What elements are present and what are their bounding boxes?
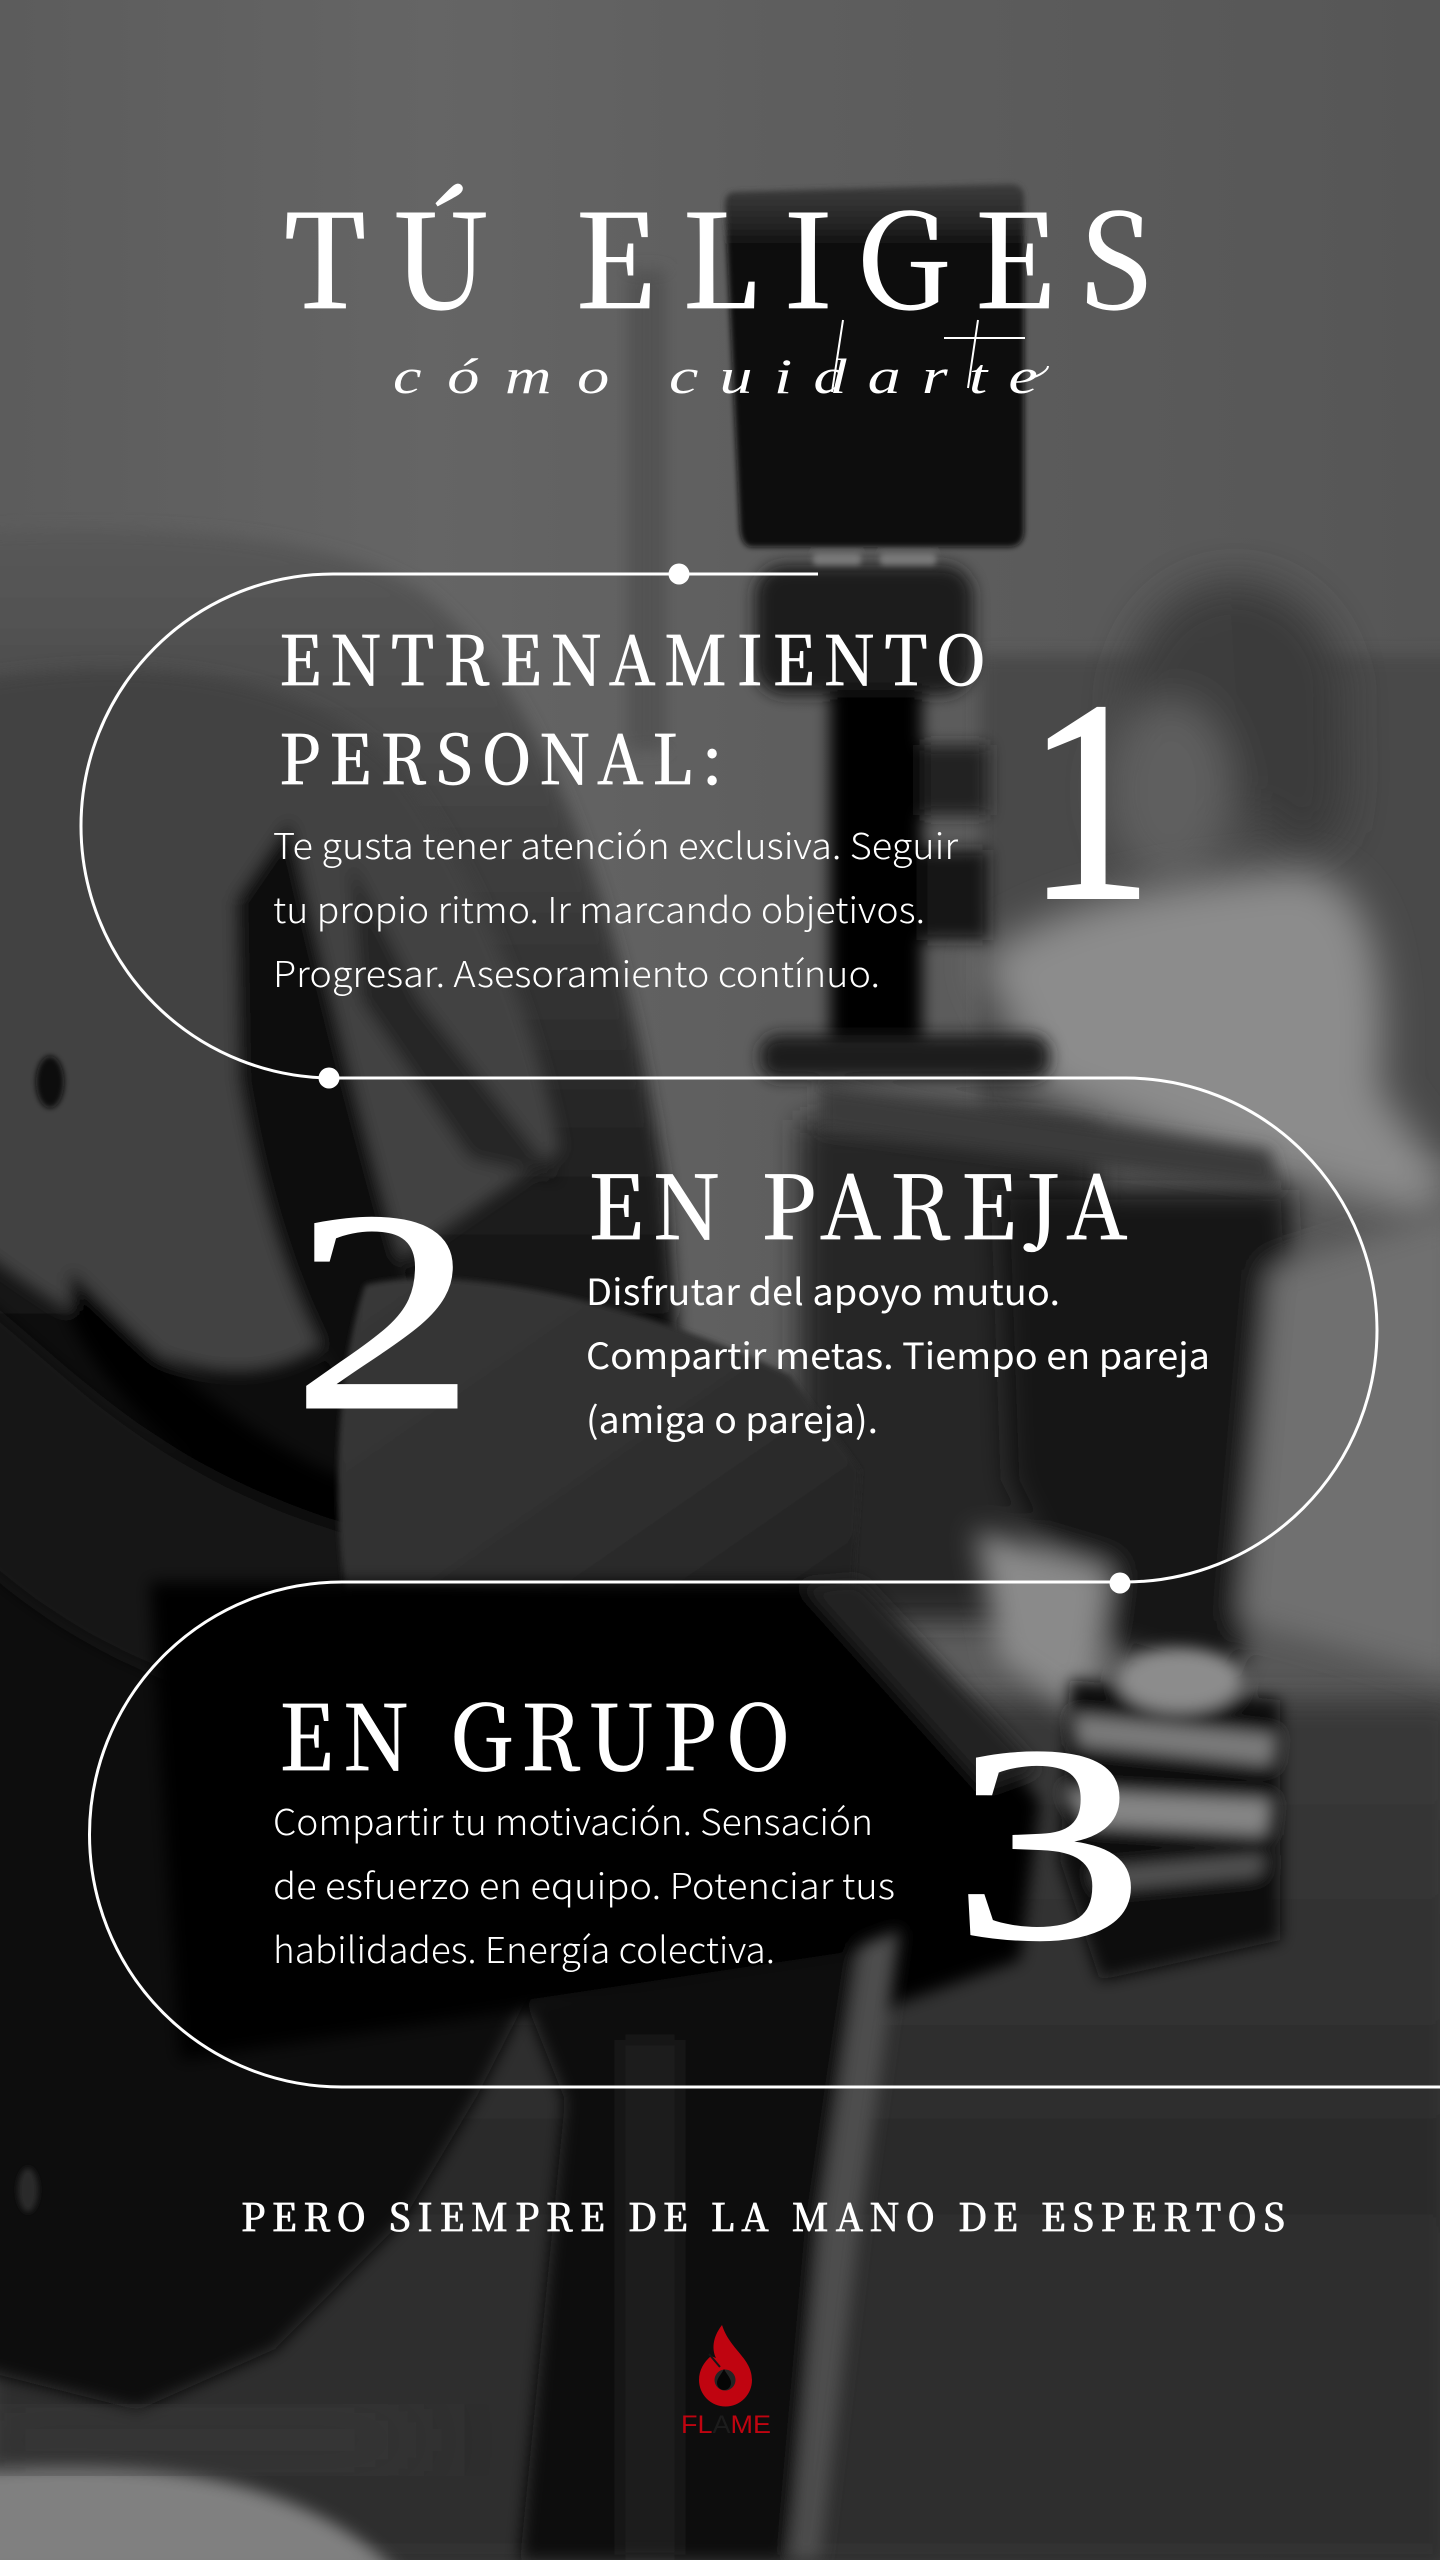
- woman: shirt and arm: [980, 870, 1440, 1220]
- body text 3: [273, 1794, 895, 1974]
- body text 3: de esfuerzo en equipo. Potenciar tus: [273, 1858, 895, 1910]
- foreground blob: [0, 2465, 400, 2560]
- heading: entrenamiento personal: [279, 608, 995, 804]
- centre dark beam: [150, 1580, 1040, 2060]
- heading: en pareja: EN PAREJA: [588, 1139, 1137, 1265]
- body text 3: Compartir tu motivación. Sensación: [273, 1794, 873, 1846]
- body text 2: Compartir metas. Tiempo en pareja: [586, 1328, 1210, 1380]
- section 3: [273, 1666, 1144, 1998]
- subtitle script: cuidarte: [669, 348, 1059, 404]
- closing line: PERO SIEMPRE DE LA MANO DE ESPERTOS: [241, 2187, 1292, 2242]
- floor: [0, 1700, 1440, 2560]
- big wheel: [0, 530, 690, 2410]
- body text 1: Te gusta tener atención exclusiva. Seguir: [273, 818, 959, 870]
- body text 2: [586, 1264, 1210, 1444]
- heading: entrenamiento personal: PERSONAL:: [279, 707, 732, 804]
- logo wordmark: FLAME: [681, 2411, 771, 2439]
- title: TÚ ELIGES: [284, 159, 1178, 346]
- number 1: 1: [1027, 644, 1152, 960]
- cylinder hub: [338, 1278, 860, 1640]
- subtitle script: cómo: [393, 348, 635, 404]
- monitor: [725, 184, 1024, 565]
- heading: en grupo: EN GRUPO: [279, 1666, 800, 1796]
- wheel holes: [18, 1056, 64, 2212]
- logo: flame: [681, 2325, 771, 2439]
- footrest: [1060, 1648, 1280, 1980]
- right of legs dark underlay: [800, 1120, 1100, 1620]
- wheel rim and spokes: [0, 669, 560, 1720]
- heading: entrenamiento personal: ENTRENAMIENTO: [279, 608, 995, 705]
- subtitle script: [393, 320, 1059, 404]
- number 2: 2: [292, 1154, 476, 1469]
- couch behind the woman: [980, 655, 1440, 1155]
- monitor stem: [755, 565, 988, 1050]
- body text 3: habilidades. Energía colectiva.: [273, 1922, 775, 1974]
- body text 2: (amiga o pareja).: [586, 1392, 878, 1444]
- body text 2: Disfrutar del apoyo mutuo.: [586, 1264, 1060, 1316]
- handle bar: [760, 1035, 1280, 1190]
- woman: legs: [975, 1190, 1440, 1720]
- icon: flame: [699, 2325, 752, 2406]
- connecting curved lines: [81, 564, 1440, 2087]
- body text 1: Progresar. Asesoramiento contínuo.: [273, 946, 880, 998]
- body text 1: tu propio ritmo. Ir marcando objetivos.: [273, 882, 925, 934]
- machine rail: [520, 1930, 900, 2560]
- woman: hair: [1108, 580, 1346, 880]
- body text 1: [273, 818, 959, 998]
- door frame: [628, 270, 666, 750]
- section 1: [273, 608, 1152, 998]
- number 3: 3: [952, 1690, 1144, 1998]
- section 2: [292, 1139, 1210, 1469]
